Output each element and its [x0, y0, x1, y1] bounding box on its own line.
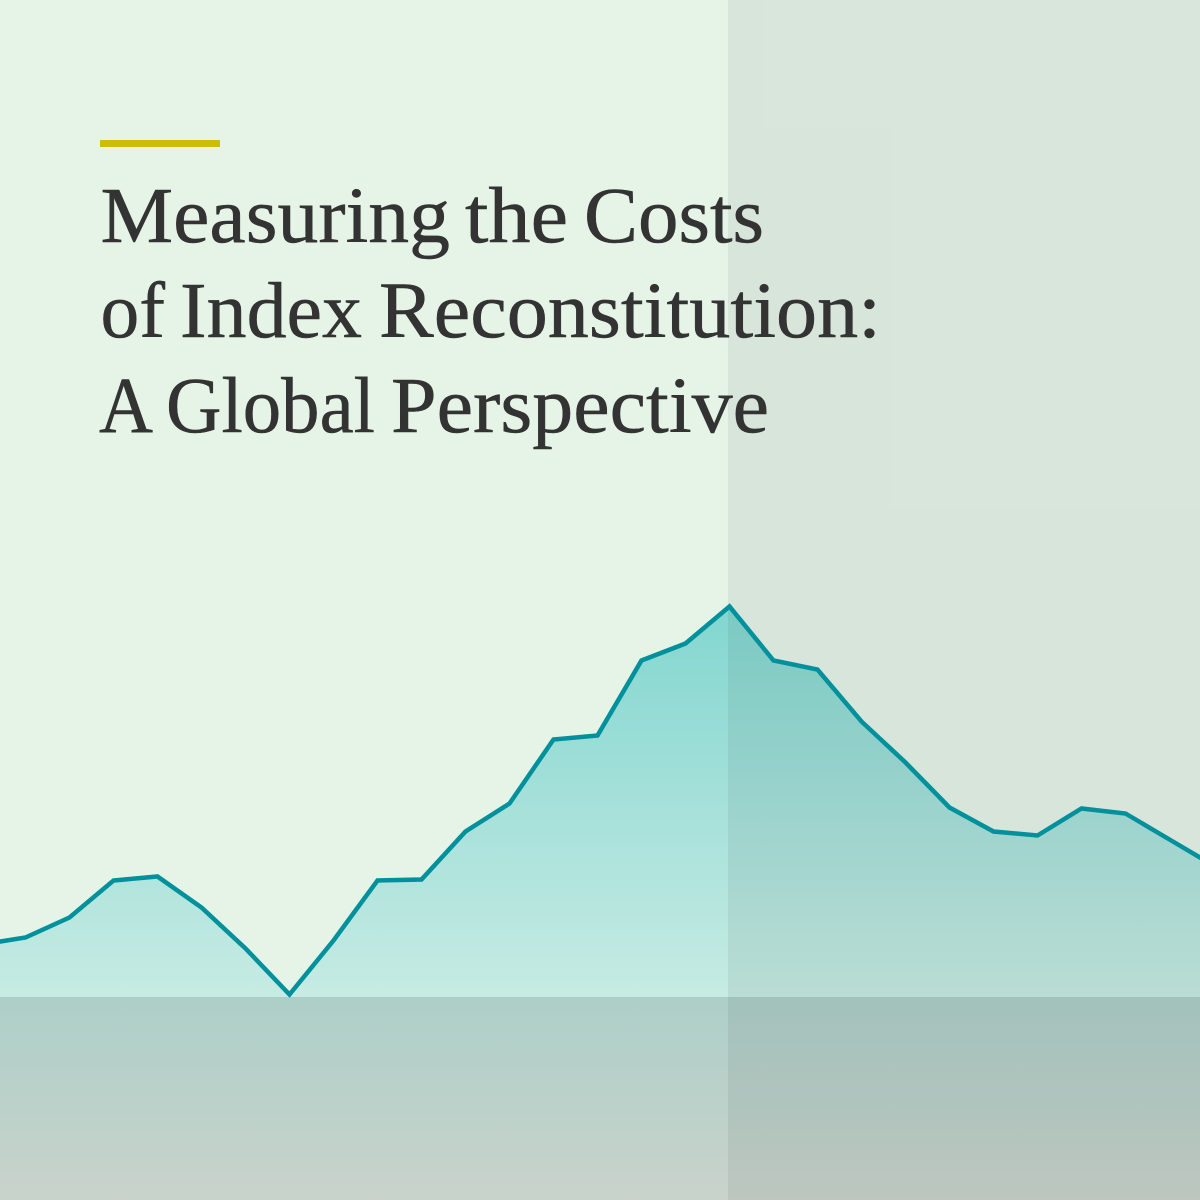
- title: A: [99, 363, 153, 450]
- title: Perspective: [391, 363, 769, 450]
- title: the: [465, 173, 568, 260]
- title: Measuring: [100, 173, 450, 260]
- title: Reconstitution:: [379, 268, 881, 355]
- title: of: [100, 268, 166, 355]
- area chart line: [0, 606, 1200, 994]
- right shaded panel: [728, 0, 1200, 1200]
- title: Global: [166, 363, 375, 450]
- area chart fill: [0, 606, 1200, 997]
- accent rule: [100, 140, 220, 147]
- bottom band: [0, 997, 1200, 1200]
- title: Index: [180, 268, 362, 355]
- title: [99, 173, 881, 450]
- title: Costs: [584, 173, 764, 260]
